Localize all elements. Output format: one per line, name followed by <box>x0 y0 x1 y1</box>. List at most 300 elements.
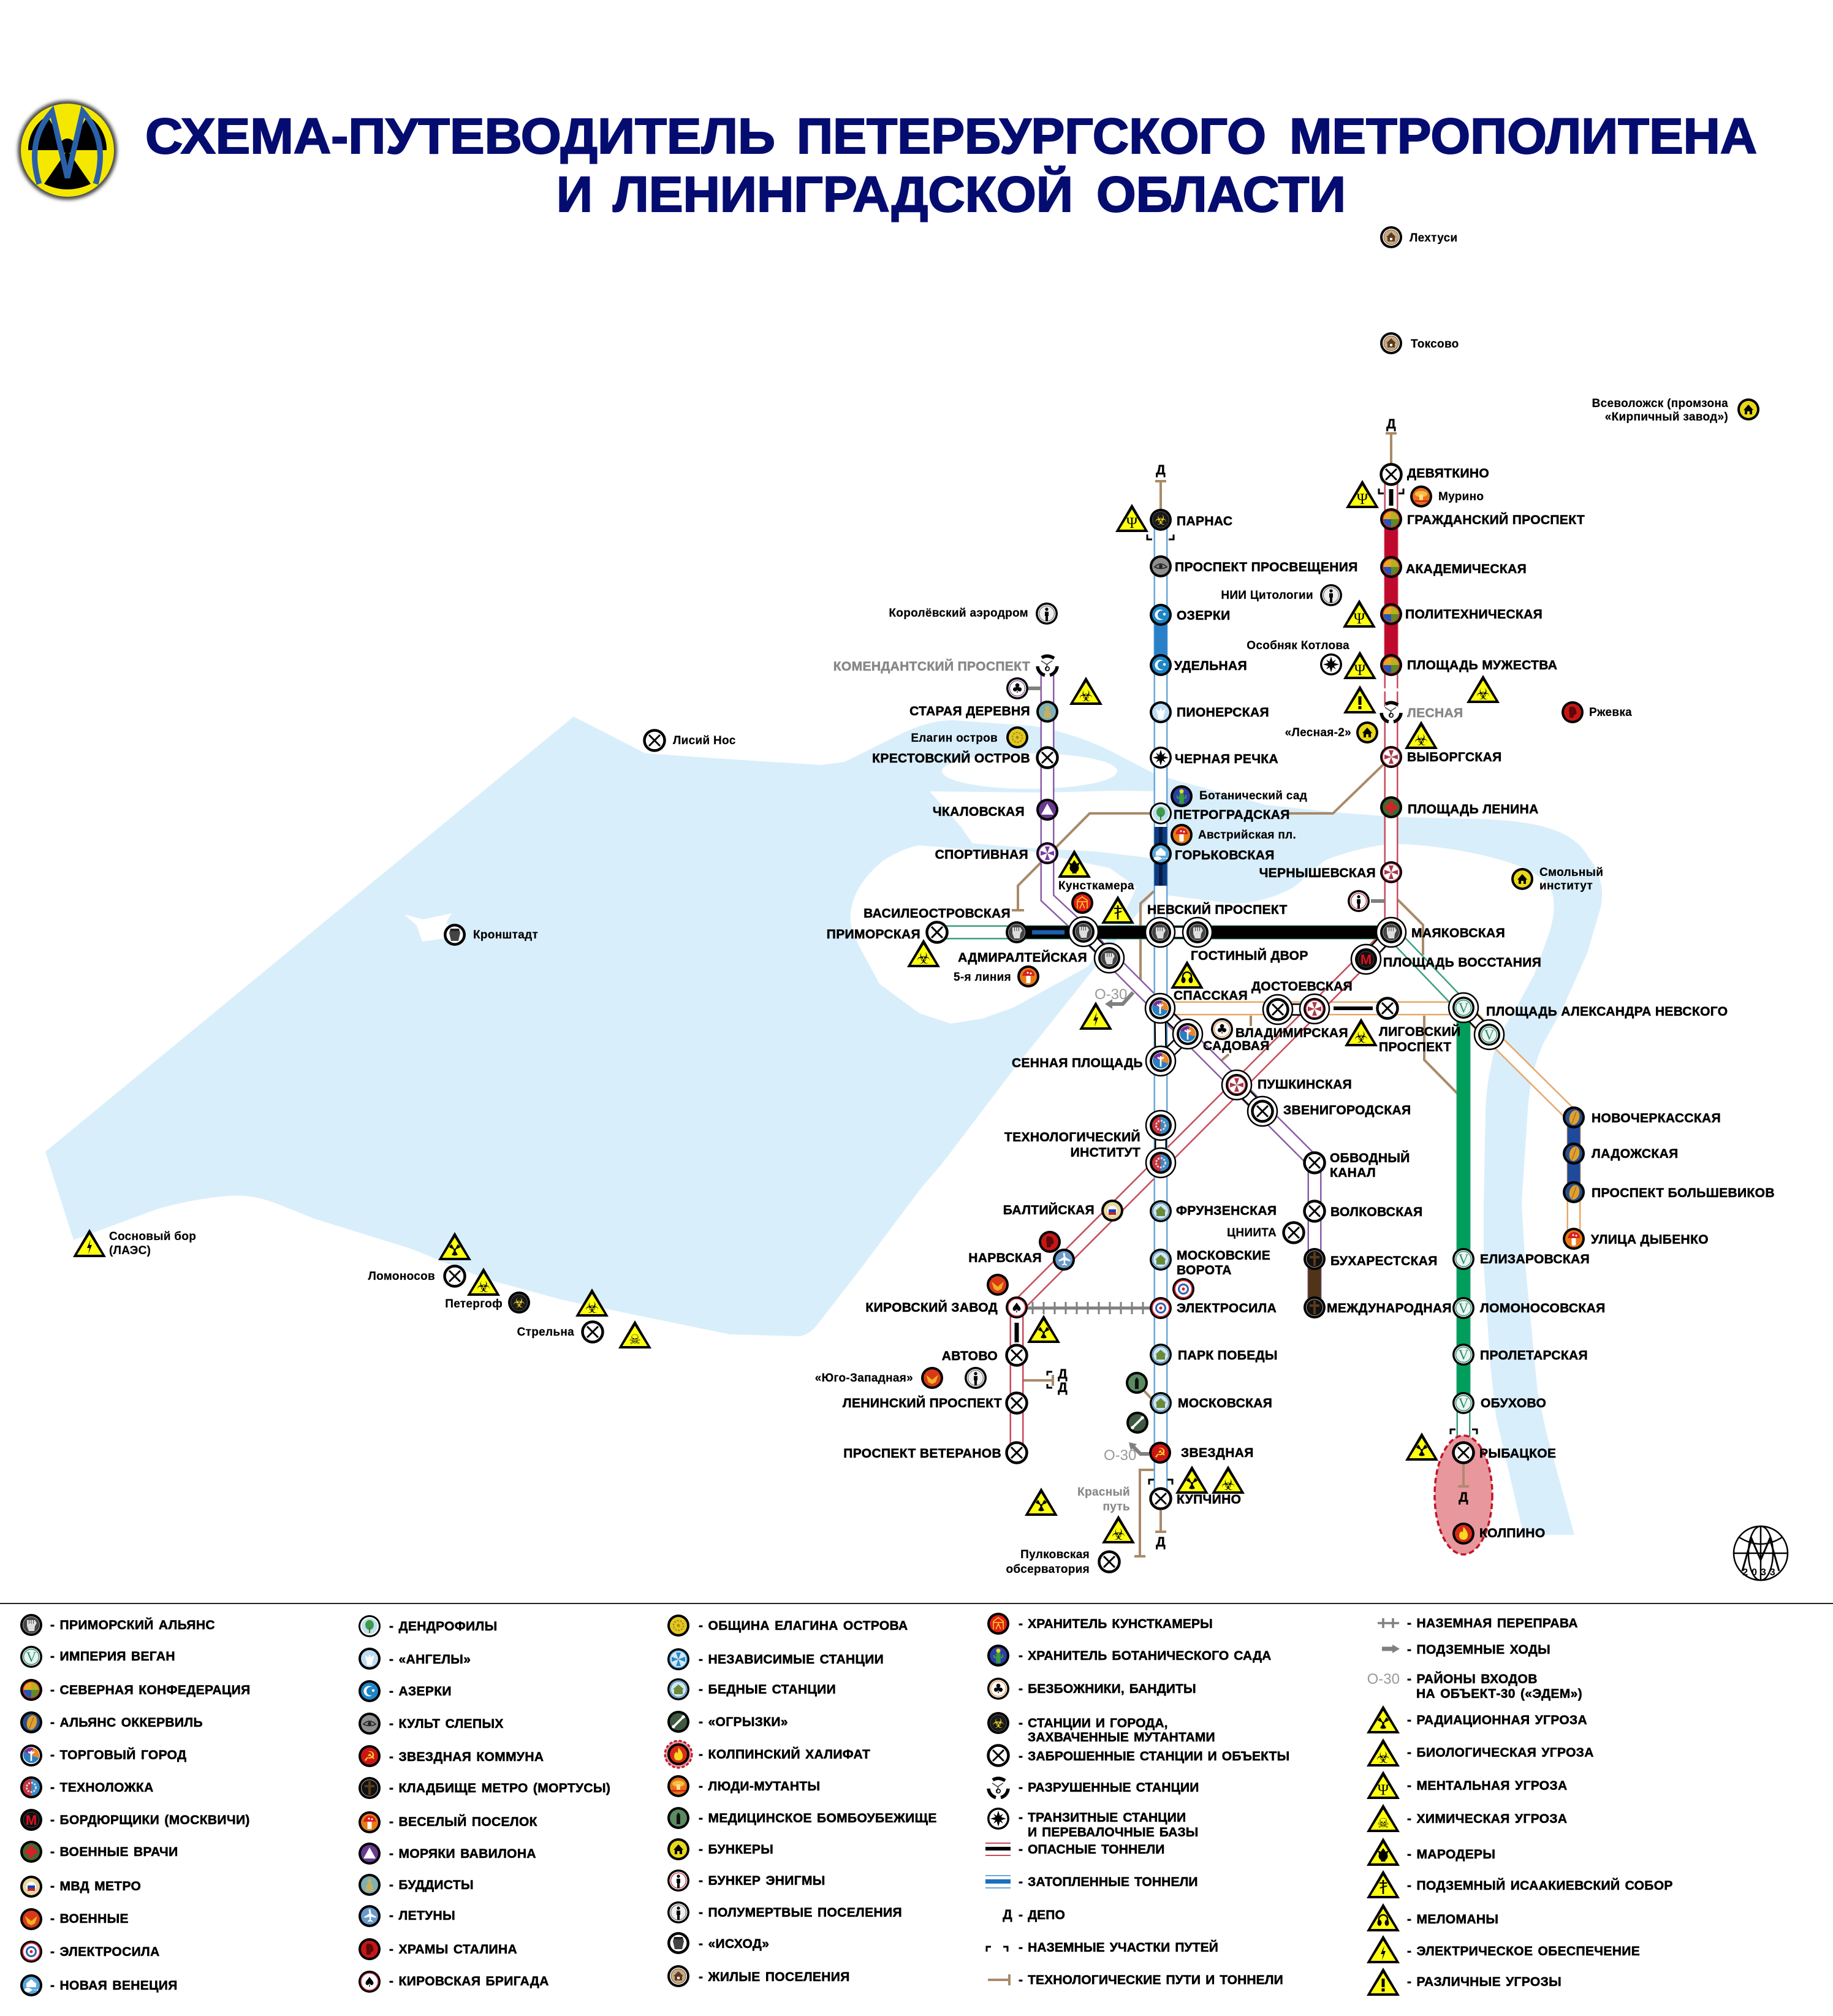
station: Лесная-2: «Лесная-2» <box>1285 726 1351 739</box>
station: Приморская: ПРИМОРСКАЯ <box>827 927 920 941</box>
station: Парк Победы <box>1150 1344 1278 1366</box>
station: Стрельна <box>517 1322 603 1342</box>
station: Гражданский проспект <box>1380 508 1585 530</box>
title: ОБЛАСТИ <box>1096 167 1346 223</box>
station: Удельная: УДЕЛЬНАЯ <box>1174 659 1247 673</box>
legend: Станции и города, захваченные мутантами: ЗАХВАЧЕННЫЕ МУТАНТАМИ <box>1028 1730 1215 1744</box>
station: Смольный институт: Смольный <box>1539 866 1603 879</box>
station: Озерки: ОЗЕРКИ <box>1177 609 1231 623</box>
legend: Техноложка: - ТЕХНОЛОЖКА <box>50 1781 154 1795</box>
legend: Опасные тоннели: - ОПАСНЫЕ ТОННЕЛИ <box>1019 1843 1164 1857</box>
legend: Хранитель Кунсткамеры <box>987 1613 1213 1635</box>
station: Выборгская: ВЫБОРГСКАЯ <box>1407 750 1502 764</box>
legend: Кировская бригада <box>359 1971 549 1993</box>
station: Пионерская: ПИОНЕРСКАЯ <box>1177 706 1269 720</box>
zone: Колпинский халифат <box>1435 1436 1556 1554</box>
threat: биологическая <box>1467 675 1500 703</box>
legend: Храмы Сталина <box>359 1938 517 1960</box>
threat: ментальная <box>1346 480 1379 508</box>
station: Фрунзенская: ФРУНЗЕНСКАЯ <box>1176 1204 1277 1218</box>
legend: Электрическое обеспечение <box>1367 1935 1640 1963</box>
legend: Исход: - «ИСХОД» <box>699 1937 769 1951</box>
station: Автово <box>942 1345 1027 1366</box>
threat: биологическая <box>1212 1466 1245 1494</box>
legend: Приморский Альянс: - ПРИМОРСКИЙ АЛЬЯНС <box>50 1618 215 1632</box>
legend: Северная конфедерация <box>20 1679 251 1701</box>
legend: Летуны: - ЛЕТУНЫ <box>389 1909 455 1923</box>
station: Лехтуси <box>1380 226 1457 248</box>
legend: Биологическая угроза: - БИОЛОГИЧЕСКАЯ УГРОЗА <box>1407 1746 1594 1760</box>
depot mark: Парнас: Д <box>1156 462 1166 477</box>
title: СХЕМА-ПУТЕВОДИТЕЛЬ <box>145 108 775 164</box>
legend: МВД метро <box>20 1876 141 1898</box>
station: Кировский завод <box>865 1296 1028 1318</box>
surface crossing: Кировский завод - Электросила <box>1017 1302 1161 1314</box>
station: Петергоф: Петергоф <box>445 1298 503 1310</box>
legend: Храмы Сталина: - ХРАМЫ СТАЛИНА <box>389 1942 517 1957</box>
line 2: blue <box>1153 520 1168 1499</box>
legend: Община Елагина острова <box>667 1615 908 1637</box>
station: Технологический институт: ИНСТИТУТ <box>1071 1146 1140 1160</box>
station: Кронштадт <box>444 924 538 946</box>
station: Проспект Ветеранов <box>843 1443 1027 1463</box>
legend: Военные <box>20 1908 129 1930</box>
station: Ломоносовская: ЛОМОНОСОВСКАЯ <box>1480 1301 1606 1315</box>
station: Юго-Западная <box>815 1367 943 1389</box>
threat: радиационная <box>1027 1315 1060 1343</box>
legend: Безбожники, бандиты <box>987 1678 1196 1700</box>
station: Обводный канал <box>1304 1151 1410 1180</box>
legend: Биологическая угроза <box>1367 1738 1594 1767</box>
station: Королёвский аэродром <box>889 603 1058 625</box>
station: Политехническая <box>1380 603 1543 625</box>
station: Пролетарская: ПРОЛЕТАРСКАЯ <box>1480 1348 1588 1363</box>
station: Чкаловская: ЧКАЛОВСКАЯ <box>933 805 1025 819</box>
station: безбожники <box>1006 677 1028 699</box>
legend: Мародеры <box>1367 1838 1495 1866</box>
station: Старая деревня <box>909 701 1058 723</box>
threat: биологическая <box>907 939 940 967</box>
legend: Колпинский халифат <box>665 1741 870 1768</box>
threat: радиационная <box>1405 1432 1438 1461</box>
zone: Колпинский халифат: КОЛПИНО <box>1479 1526 1546 1540</box>
surface section brackets <box>1047 489 1477 1485</box>
station: Новочеркасская <box>1563 1106 1721 1128</box>
title: ПЕТЕРБУРГСКОГО <box>797 108 1266 164</box>
station: Площадь Мужества: ПЛОЩАДЬ МУЖЕСТВА <box>1407 658 1557 672</box>
legend: Буддисты <box>359 1874 474 1896</box>
station: Чернышевская <box>1259 861 1402 883</box>
station: Елагин остров: Елагин остров <box>911 732 998 745</box>
legend column 1 <box>20 1614 251 1996</box>
zone: Колпинский халифат: РЫБАЦКОЕ <box>1479 1447 1556 1461</box>
station: Нарвская: НАРВСКАЯ <box>968 1251 1042 1265</box>
legend column 4 <box>985 1613 1289 1987</box>
logo: Metro 2033 <box>1734 1526 1788 1580</box>
legend: Летуны <box>359 1905 455 1927</box>
station: Волковская: ВОЛКОВСКАЯ <box>1330 1205 1422 1219</box>
threat: меломаны <box>1171 960 1204 989</box>
station: Академическая: АКАДЕМИЧЕСКАЯ <box>1406 562 1527 576</box>
legend: Новая Венеция <box>20 1974 178 1996</box>
station: Лесная-2 <box>1285 721 1378 744</box>
station: Ржевка <box>1562 701 1632 723</box>
station: Площадь Ленина: ПЛОЩАДЬ ЛЕНИНА <box>1408 802 1539 816</box>
station: Сосновый бор: Сосновый бор <box>109 1230 196 1243</box>
station: Площадь Ленина <box>1380 796 1539 818</box>
station: Купчино <box>1151 1488 1241 1509</box>
station: Всеволожск: Всеволожск (промзона <box>1592 397 1728 410</box>
station: Владимирская <box>1300 994 1329 1024</box>
station: Невский проспект <box>1145 902 1288 947</box>
threat: биологическая <box>1069 677 1102 705</box>
station: Огрызки <box>1126 1412 1148 1434</box>
legend: Культ слепых: - КУЛЬТ СЛЕПЫХ <box>389 1717 504 1731</box>
station: Парнас <box>1150 509 1232 531</box>
station: Выборгская <box>1380 746 1502 768</box>
station: Купчино: КУПЧИНО <box>1177 1493 1241 1507</box>
station: Девяткино: ДЕВЯТКИНО <box>1407 466 1489 481</box>
legend: Бункеры <box>667 1838 773 1860</box>
legend: Моряки Вавилона <box>359 1843 536 1865</box>
station: Лисий Нос <box>645 731 736 750</box>
station: Электросила: ЭЛЕКТРОСИЛА <box>1177 1301 1277 1315</box>
station: Сосновый бор: (ЛАЭС) <box>109 1244 151 1257</box>
legend: Независимые станции <box>667 1648 884 1670</box>
legend: Кладбище метро: - КЛАДБИЩЕ МЕТРО (МОРТУСЫ) <box>389 1781 610 1795</box>
station: Балтийская: БАЛТИЙСКАЯ <box>1003 1203 1095 1217</box>
station: Кунсткамера: Кунсткамера <box>1058 880 1134 892</box>
line 4: orange <box>1160 1008 1574 1239</box>
station: Военные у Кировского завода <box>987 1274 1009 1296</box>
legend: Альянс Оккервиль: - АЛЬЯНС ОККЕРВИЛЬ <box>50 1716 203 1730</box>
legend: Подземный Исаакиевский собор <box>1367 1870 1673 1898</box>
station: Комендантский проспект <box>833 656 1057 675</box>
legend: Буддисты: - БУДДИСТЫ <box>389 1878 474 1892</box>
station: 5-я линия <box>954 965 1039 987</box>
station: Чернышевская: ЧЕРНЫШЕВСКАЯ <box>1259 866 1376 880</box>
station: Пионерская <box>1150 701 1269 723</box>
legend: Бункер Энигмы: - БУНКЕР ЭНИГМЫ <box>699 1874 825 1888</box>
station: поселение у Автово <box>965 1367 987 1389</box>
station: Юго-Западная: «Юго-Западная» <box>815 1372 913 1385</box>
station: Обводный канал: ОБВОДНЫЙ <box>1330 1151 1410 1165</box>
station: Садовая <box>1173 1019 1270 1053</box>
station: Петроградская <box>1150 802 1290 824</box>
title <box>145 108 1757 223</box>
station: Проспект Большевиков: ПРОСПЕКТ БОЛЬШЕВИКОВ <box>1592 1186 1775 1200</box>
station: Адмиралтейская: АДМИРАЛТЕЙСКАЯ <box>958 950 1087 965</box>
station: Московская <box>1150 1392 1272 1414</box>
legend: Депо <box>1003 1907 1065 1922</box>
legend: Электрическое обеспечение: - ЭЛЕКТРИЧЕСКОЕ ОБЕСПЕЧЕНИЕ <box>1407 1944 1640 1958</box>
legend: Подземные ходы: - ПОДЗЕМНЫЕ ХОДЫ <box>1407 1643 1550 1657</box>
station: Токсово: Токсово <box>1411 338 1459 351</box>
station: Академическая <box>1380 556 1527 578</box>
station: Звенигородская <box>1248 1097 1411 1126</box>
station: Пулковская обсерватория: Пулковская <box>1020 1548 1090 1561</box>
station: Чкаловская <box>933 799 1058 821</box>
legend: Огрызки: - «ОГРЫЗКИ» <box>699 1715 788 1729</box>
station: Петергоф <box>445 1291 530 1314</box>
station: Площадь Александра Невского 1: ПЛОЩАДЬ АЛЕКСАНДРА НЕВСКОГО <box>1486 1005 1728 1019</box>
station: Звездная <box>1149 1442 1254 1464</box>
station: Маяковская <box>1376 918 1505 947</box>
legend: Азерки: - АЗЕРКИ <box>389 1684 452 1698</box>
station: Московские ворота <box>1150 1249 1270 1277</box>
tunnel mark: О-30: О-30 <box>1095 986 1127 1003</box>
legend: Торговый город <box>20 1744 186 1767</box>
station: НИИ Цитологии <box>1221 584 1342 606</box>
title: МЕТРОПОЛИТЕНА <box>1289 108 1757 164</box>
station: Технологический институт: ТЕХНОЛОГИЧЕСКИЙ <box>1004 1130 1140 1144</box>
station: Королёвский аэродром: Королёвский аэродром <box>889 607 1028 620</box>
technical tunnels <box>1012 433 1457 1556</box>
legend: Ангелы <box>359 1648 471 1670</box>
legend: Хранитель Ботанического сада <box>987 1645 1271 1667</box>
station: Ботанический сад: Ботанический сад <box>1199 789 1307 802</box>
station: Петроградская: ПЕТРОГРАДСКАЯ <box>1174 808 1290 822</box>
legend: Азерки <box>359 1680 452 1702</box>
depot marks: Д <box>1058 1380 1068 1395</box>
island: Vasilievsky <box>851 845 1137 1024</box>
station: Московские ворота: ВОРОТА <box>1177 1263 1232 1277</box>
station: Пушкинская <box>1222 1070 1352 1100</box>
interchange connectors <box>1083 932 1489 1163</box>
station: Сенная площадь <box>1012 1046 1175 1076</box>
label: Красный путь: Красный <box>1077 1486 1130 1499</box>
station: Площадь Восстания <box>1351 945 1541 974</box>
station: Политехническая: ПОЛИТЕХНИЧЕСКАЯ <box>1405 607 1543 622</box>
station: Волковская <box>1304 1201 1422 1221</box>
station: Гражданский проспект: ГРАЖДАНСКИЙ ПРОСПЕКТ <box>1407 512 1585 527</box>
legend: Районы входов на Объект-30: НА ОБЪЕКТ-30 («ЭДЕМ») <box>1416 1687 1582 1701</box>
legend: Дендрофилы <box>359 1615 498 1637</box>
legend: Станции и города, захваченные мутантами <box>987 1712 1215 1744</box>
legend: Бордюрщики: - БОРДЮРЩИКИ (МОСКВИЧИ) <box>50 1813 250 1827</box>
station: Крестовский остров <box>872 748 1058 767</box>
legend: Звездная коммуна: - ЗВЕЗДНАЯ КОММУНА <box>389 1750 544 1764</box>
station: Старая деревня: СТАРАЯ ДЕРЕВНЯ <box>909 704 1030 718</box>
station: Спасская <box>1145 989 1248 1023</box>
station: Ржевка: Ржевка <box>1589 706 1632 719</box>
legend: Медицинское бомбоубежище: - МЕДИЦИНСКОЕ БОМБОУБЕЖИЩЕ <box>699 1811 937 1825</box>
legend: Станции и города, захваченные мутантами: - СТАНЦИИ И ГОРОДА, <box>1019 1716 1168 1730</box>
station: Проспект Большевиков <box>1563 1181 1775 1203</box>
legend: Ментальная угроза: - МЕНТАЛЬНАЯ УГРОЗА <box>1407 1779 1568 1793</box>
legend: Техноложка <box>20 1776 154 1798</box>
legend: Военные врачи <box>20 1841 178 1863</box>
station: Гостиный двор <box>1183 918 1308 963</box>
legend: Колпинский халифат: - КОЛПИНСКИЙ ХАЛИФАТ <box>699 1747 870 1762</box>
tunnel mark: О-30 south: О-30 <box>1104 1447 1136 1464</box>
depot marks: Д <box>1058 1366 1068 1382</box>
legend: Бункер Энигмы <box>667 1870 825 1892</box>
legend: Районы входов на Объект-30 <box>1367 1671 1582 1701</box>
legend: Разрушенные станции <box>989 1778 1199 1797</box>
station: Пролетарская <box>1452 1344 1588 1366</box>
station: Адмиралтейская <box>958 943 1124 973</box>
station: Удельная <box>1150 654 1247 676</box>
station: Технологический институт <box>1004 1111 1175 1177</box>
station: Горьковская <box>1150 843 1275 865</box>
legend: Военные врачи: - ВОЕННЫЕ ВРАЧИ <box>50 1845 178 1859</box>
threat: мародеры <box>1058 850 1091 878</box>
threat: химическая <box>618 1320 651 1348</box>
station: Международная <box>1304 1296 1452 1318</box>
legend: Ангелы: - «АНГЕЛЫ» <box>389 1653 471 1667</box>
station: Ломоносовская <box>1452 1297 1606 1319</box>
station: Черная речка: ЧЕРНАЯ РЕЧКА <box>1175 752 1278 766</box>
threat: биологическая <box>1345 1018 1378 1046</box>
threat: биологическая <box>575 1288 609 1317</box>
legend: Заброшенные станции и объекты <box>988 1746 1289 1765</box>
legend: Меломаны <box>1367 1903 1498 1931</box>
threat: биологическая <box>467 1268 500 1296</box>
station: Смольный институт <box>1511 866 1603 892</box>
station: Мурино <box>1410 485 1484 508</box>
station: Крестовский остров: КРЕСТОВСКИЙ ОСТРОВ <box>872 751 1030 766</box>
bunker connectors <box>1028 688 1385 901</box>
station: Проспект Просвещения <box>1150 555 1358 577</box>
legend: Огрызки <box>667 1711 788 1733</box>
legend: Районы входов на Объект-30: О-30 <box>1367 1671 1400 1687</box>
legend: МВД метро: - МВД МЕТРО <box>50 1879 141 1893</box>
label: Красный путь <box>1077 1486 1130 1513</box>
station: Невский проспект: НЕВСКИЙ ПРОСПЕКТ <box>1147 902 1288 917</box>
station: Парнас: ПАРНАС <box>1177 514 1232 528</box>
station: Кронштадт: Кронштадт <box>473 929 538 941</box>
station: бункер Энигмы <box>1348 890 1370 912</box>
island: Krestovsky <box>942 753 1117 789</box>
tunnel mark: О-30 <box>1095 986 1133 1009</box>
legend: Полумертвые поселения <box>667 1901 902 1923</box>
threat: электрическая <box>1079 1002 1112 1030</box>
station: Черная речка <box>1150 747 1278 769</box>
legend: Кировская бригада: - КИРОВСКАЯ БРИГАДА <box>389 1974 549 1988</box>
station: Парк Победы: ПАРК ПОБЕДЫ <box>1178 1348 1278 1363</box>
station: Австрийская пл.: Австрийская пл. <box>1198 829 1296 842</box>
station: Кунсткамера <box>1058 880 1134 914</box>
station: Сосновый бор <box>73 1229 196 1257</box>
station: Пушкинская: ПУШКИНСКАЯ <box>1258 1078 1352 1092</box>
legend: Моряки Вавилона: - МОРЯКИ ВАВИЛОНА <box>389 1847 536 1861</box>
legend: Наземная переправа: - НАЗЕМНАЯ ПЕРЕПРАВА <box>1407 1616 1578 1630</box>
legend: Звездная коммуна <box>359 1745 544 1767</box>
legend: Электросила: - ЭЛЕКТРОСИЛА <box>50 1945 160 1959</box>
station: Девяткино <box>1381 465 1489 484</box>
station: Лиговский проспект <box>1378 998 1460 1054</box>
station: Маяковская: МАЯКОВСКАЯ <box>1411 926 1505 940</box>
station: Лиговский проспект: ЛИГОВСКИЙ <box>1379 1024 1460 1039</box>
station: Комендантский проспект: КОМЕНДАНТСКИЙ ПРОСПЕКТ <box>833 659 1030 674</box>
station: Садовая: САДОВАЯ <box>1203 1039 1270 1053</box>
legend column 3 <box>665 1615 937 1987</box>
station: Василеостровская: ВАСИЛЕОСТРОВСКАЯ <box>863 907 1011 921</box>
legend: Независимые станции: - НЕЗАВИСИМЫЕ СТАНЦИИ <box>699 1653 884 1667</box>
legend: Жилые поселения: - ЖИЛЫЕ ПОСЕЛЕНИЯ <box>699 1970 850 1984</box>
station: Особняк Котлова: Особняк Котлова <box>1247 639 1349 652</box>
legend: Торговый город: - ТОРГОВЫЙ ГОРОД <box>50 1748 186 1762</box>
legend: Безбожники, бандиты: - БЕЗБОЖНИКИ, БАНДИТЫ <box>1019 1682 1196 1696</box>
station: Международная: МЕЖДУНАРОДНАЯ <box>1327 1301 1452 1315</box>
legend: Ментальная угроза <box>1367 1771 1568 1799</box>
threat: радиационная <box>1175 1466 1209 1494</box>
station: Площадь Александра Невского 1 <box>1449 993 1728 1022</box>
station: Елагин остров <box>911 726 1028 748</box>
legend: Депо: - ДЕПО <box>1019 1908 1065 1922</box>
legend: Транзитные станции: И ПЕРЕВАЛОЧНЫЕ БАЗЫ <box>1028 1825 1198 1839</box>
legend: Заброшенные станции и объекты: - ЗАБРОШЕННЫЕ СТАНЦИИ И ОБЪЕКТЫ <box>1019 1749 1289 1763</box>
tunnel mark: О-30 south <box>1104 1442 1149 1464</box>
station: ЦНИИТА: ЦНИИТА <box>1227 1227 1277 1239</box>
water: Gulf of Finland and Neva river <box>45 717 1602 1535</box>
legend: Медицинское бомбоубежище <box>667 1807 937 1829</box>
threat: ментальная <box>1343 599 1376 628</box>
station: Особняк Котлова <box>1247 639 1349 675</box>
legend: Электросила <box>20 1941 160 1963</box>
legend: Новая Венеция: - НОВАЯ ВЕНЕЦИЯ <box>50 1979 178 1993</box>
title: И <box>556 167 593 223</box>
legend: Бедные станции <box>667 1678 836 1700</box>
legend: Жилые поселения <box>667 1965 850 1987</box>
legend: Различные угрозы: - РАЗЛИЧНЫЕ УГРОЗЫ <box>1407 1975 1562 1989</box>
zone: Колпинский халифат: Д <box>1459 1489 1468 1505</box>
threat: радиационная <box>438 1232 471 1260</box>
station: Балтийская <box>1003 1200 1123 1222</box>
station: Московская: МОСКОВСКАЯ <box>1178 1396 1272 1410</box>
title: ЛЕНИНГРАДСКОЙ <box>613 166 1073 223</box>
legend: Химическая угроза <box>1367 1804 1567 1832</box>
legend column 5 <box>1367 1616 1673 1996</box>
station: Звездная: ЗВЕЗДНАЯ <box>1181 1446 1254 1460</box>
legend: Радиационная угроза: - РАДИАЦИОННАЯ УГРОЗА <box>1407 1713 1587 1727</box>
island: Kotlin <box>404 913 457 941</box>
station: Электросила база <box>1172 1278 1194 1300</box>
station: ЦНИИТА <box>1227 1222 1304 1243</box>
legend: Депо: Д <box>1003 1907 1012 1922</box>
logo: radiation metro emblem <box>18 101 117 200</box>
legend: Бункеры: - БУНКЕРЫ <box>699 1843 773 1857</box>
legend: Меломаны: - МЕЛОМАНЫ <box>1407 1912 1498 1927</box>
station: Василеостровская <box>863 907 1028 943</box>
station: Всеволожск: «Кирпичный завод») <box>1605 411 1728 424</box>
depot marks <box>1058 1366 1068 1395</box>
legend: Кладбище метро <box>359 1777 610 1799</box>
legend: Транзитные станции <box>987 1808 1198 1839</box>
legend: Культ слепых <box>359 1713 504 1735</box>
station: Обводный канал: КАНАЛ <box>1330 1166 1376 1180</box>
threat: биологическая <box>1102 1515 1135 1543</box>
station: Смольный институт: институт <box>1539 880 1593 892</box>
legend column 2 <box>359 1615 610 1993</box>
threat: ментальная <box>1115 504 1148 532</box>
station: Озерки <box>1150 604 1231 626</box>
legend: Исход <box>667 1932 769 1954</box>
threat: биологическая <box>1405 721 1438 749</box>
station: Площадь Мужества <box>1380 654 1557 676</box>
station: Ботанический сад <box>1171 785 1307 807</box>
threat: различные <box>1343 685 1376 713</box>
station: Достоевская <box>1251 979 1353 1024</box>
legend: Приморский Альянс <box>20 1614 215 1636</box>
legend: Бедные станции: - БЕДНЫЕ СТАНЦИИ <box>699 1683 836 1697</box>
legend: Община Елагина острова: - ОБЩИНА ЕЛАГИНА ОСТРОВА <box>699 1619 908 1633</box>
legend: Радиационная угроза <box>1367 1705 1587 1733</box>
station: Спортивная: СПОРТИВНАЯ <box>935 848 1028 862</box>
station: Лехтуси: Лехтуси <box>1410 232 1457 245</box>
station: Токсово <box>1380 332 1459 354</box>
